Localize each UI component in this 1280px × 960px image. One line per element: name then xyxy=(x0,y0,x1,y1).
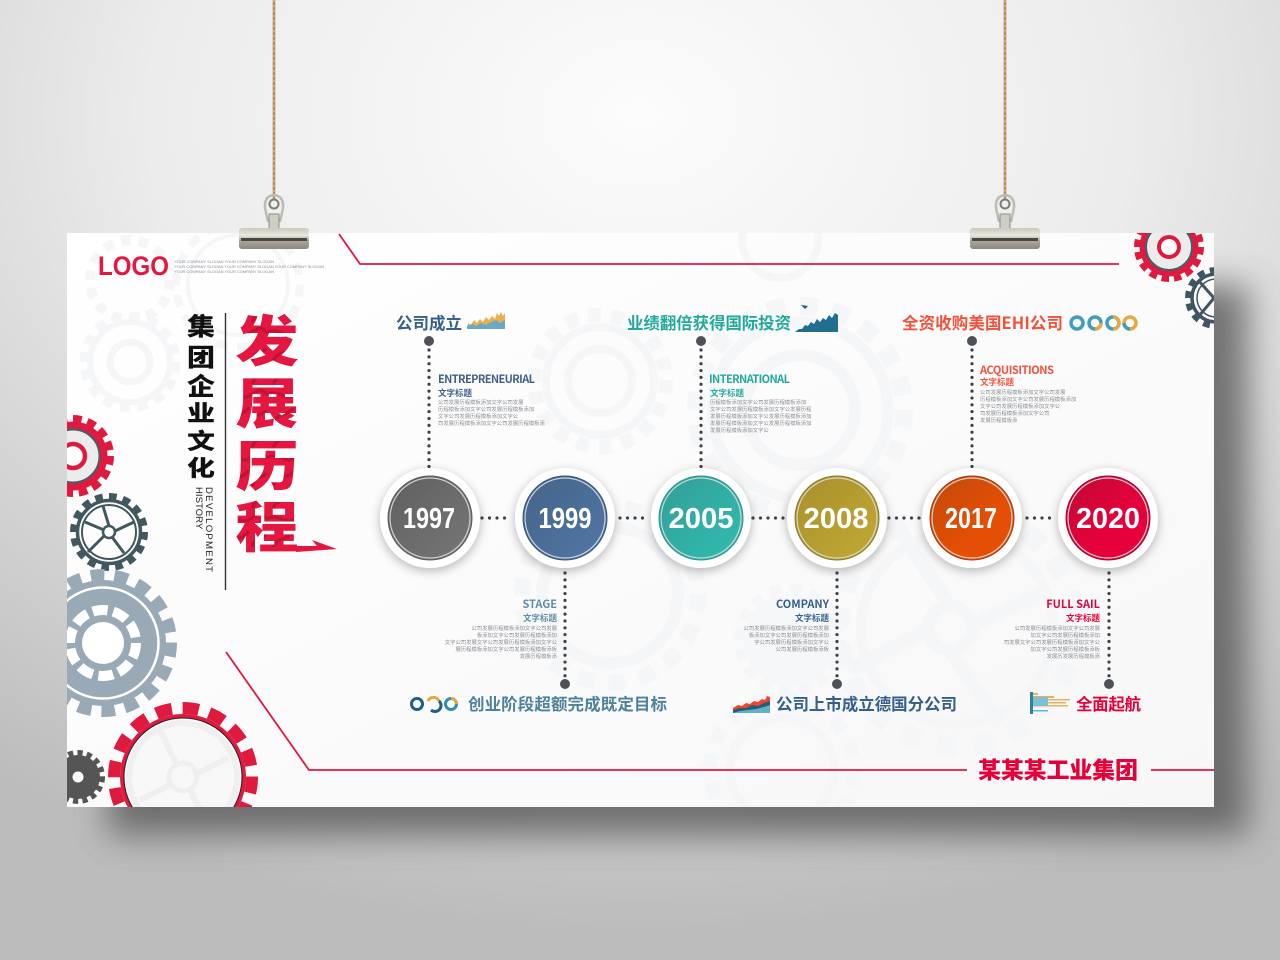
milestone 2005 top: 发展历程模板添加文字公发展历程模板添加 xyxy=(710,419,812,427)
gear: small dark xyxy=(67,750,105,804)
slogan xyxy=(174,259,324,274)
heading: 全资收购美国EHI公司 xyxy=(902,310,1063,334)
milestone 2008 bottom xyxy=(733,573,957,715)
milestone 1997 top: 历程模板添加文字公司发展历程模板添加 xyxy=(438,405,534,413)
board shadow xyxy=(108,285,1248,835)
gear: dark wheel xyxy=(74,497,144,567)
milestone 2008 bottom: 公司发展历程模板添板 xyxy=(776,645,830,653)
icon: rings xyxy=(412,697,456,712)
year badge 2005 xyxy=(651,468,751,568)
gear: large red xyxy=(108,702,258,807)
gear: dark top right xyxy=(1185,267,1214,328)
vertical subtitle: 业 xyxy=(187,396,215,428)
icon: donuts xyxy=(1071,317,1136,329)
clip left xyxy=(239,195,309,249)
milestone 2020 bottom: 加文字公司发展历程模板添板 xyxy=(1031,645,1101,653)
vertical subtitle: 团 xyxy=(187,337,215,373)
icon: bar chart xyxy=(1030,692,1070,714)
top red frame line xyxy=(339,234,1119,264)
year badge 2008 xyxy=(787,468,887,568)
milestone 2008 bottom: 板添加文字公司发展历程模板添加 xyxy=(749,631,829,639)
background gears xyxy=(80,233,304,412)
heading: 业绩翻倍获得国际投资 xyxy=(627,310,791,334)
gear: grey blue xyxy=(36,576,170,710)
heading: 公司上市成立德国分公司 xyxy=(776,691,957,715)
milestone 1999 bottom: 文字公司发展文字公司发展历程模板添加文字公 xyxy=(445,638,558,646)
main title: 发 xyxy=(235,299,299,378)
rope right xyxy=(1004,0,1006,200)
milestone 2020 bottom: 文字标题 xyxy=(1066,612,1100,624)
milestone 1999 bottom: STAGE xyxy=(522,596,557,612)
milestone 2020 bottom: 加文字公司发展历程模板添加 xyxy=(1031,631,1100,639)
milestone 2005 top: 发展历程模板添加文字公 xyxy=(710,426,769,434)
milestone 2008 bottom: 文字标题 xyxy=(795,612,829,624)
milestone 2020 bottom xyxy=(1004,573,1142,715)
title arrow xyxy=(296,540,337,552)
main title: 展 xyxy=(235,361,299,440)
bottom red frame line xyxy=(226,652,1214,770)
milestone 1999 bottom: 板添加文字公司发展历程模板添加 xyxy=(477,631,557,639)
year badge 1999: 1999 xyxy=(538,503,592,535)
vertical subtitle: 文 xyxy=(187,424,215,456)
icon: area chart xyxy=(467,312,505,329)
milestone 1999 bottom: 公司发展历程模板添加文字公司发展 xyxy=(472,624,558,632)
milestone 2008 bottom: 公司发展历程模板添加文字公司发展 xyxy=(744,624,830,632)
milestone 2017 top: ACQUISITIONS xyxy=(979,362,1054,378)
year badge 2020: 2020 xyxy=(1076,503,1140,535)
year badge 2020 xyxy=(1058,468,1158,568)
slogan: YOUR COMPANY SLOGAN YOUR COMPANY SLOGAN xyxy=(174,269,274,274)
milestone 1997 top: ENTREPRENEURIAL xyxy=(438,371,535,387)
milestone 1997 top xyxy=(396,310,546,468)
year badge 1997: 1997 xyxy=(403,503,455,535)
milestone 2017 top xyxy=(902,310,1136,468)
milestone 1999 bottom: 文字标题 xyxy=(523,612,557,624)
milestone 2005 top: 历程模板添加文字公司发展历程模板添加 xyxy=(710,398,806,406)
connector: horizontal dots xyxy=(482,516,1057,520)
year badge 2008: 2008 xyxy=(804,503,868,535)
english subtitle: HISTORY xyxy=(193,487,204,530)
milestone 1997 top: 公司发展历程模板添加文字公司发展 xyxy=(438,398,524,406)
vertical subtitle xyxy=(187,306,216,483)
milestone 2005 top: 文字标题 xyxy=(710,387,745,399)
milestone 2020 bottom: 公司发展历程模板添加文字公司发展 xyxy=(1014,624,1101,632)
milestone 1999 bottom: 展历程模板添加文字公司发展历程模板添板 xyxy=(455,645,558,653)
milestone 2017 top: 文字公司发展历程模板添加文字公 xyxy=(980,402,1061,410)
title divider xyxy=(224,313,226,590)
milestone 1999 bottom xyxy=(412,573,668,715)
company name: 某某某工业集团 xyxy=(978,751,1138,785)
milestone 2017 top: 发展历程模板添 xyxy=(980,416,1018,424)
english subtitle xyxy=(193,487,214,572)
heading: 创业阶段超额完成既定目标 xyxy=(468,691,668,715)
rope left xyxy=(273,0,275,200)
vertical subtitle: 化 xyxy=(187,451,215,483)
milestone 2008 bottom: 字公司发展历程模板添加文字公 xyxy=(754,638,830,646)
milestone 2005 top: INTERNATIONAL xyxy=(709,371,790,387)
milestone 1997 top: 司发展历程模板添加文字公司发展历程模板添 xyxy=(438,419,546,427)
year badge 2017 xyxy=(922,468,1022,568)
milestone 2020 bottom: 司发展文字公司发展历程模板添加文字公 xyxy=(1004,638,1101,646)
gear: red top right xyxy=(1134,233,1204,282)
milestone 2020 bottom: 发展历发展历程模板添 xyxy=(1047,652,1101,660)
clip right xyxy=(970,195,1040,249)
milestone 1999 bottom: 发展历程模板添 xyxy=(520,652,558,660)
main title: 历 xyxy=(235,424,299,503)
slogan: YOUR COMPANY SLOGAN YOUR COMPANY SLOGAN YOUR COMPANY SLOGAN xyxy=(174,264,324,269)
heading: 全面起航 xyxy=(1076,691,1142,715)
year badge 2005: 2005 xyxy=(668,503,734,535)
decorative gears left and corner xyxy=(67,233,1214,807)
logo: LOGO xyxy=(98,251,169,281)
milestone 2005 top: 文字公司发展历程模板添加文字公发展历程 xyxy=(710,405,812,413)
main title xyxy=(235,299,299,564)
icon: dark area chart xyxy=(795,305,838,332)
milestone 2020 bottom: FULL SAIL xyxy=(1046,596,1100,612)
milestone 1997 top: 文字公司发展历程模板添加文字公 xyxy=(438,412,519,420)
milestone 2017 top: 公司发展历程模板添加文字公司发展 xyxy=(980,388,1066,396)
milestone 2005 top: 发展历程模板添加文字公发展历程模板添加 xyxy=(710,412,812,420)
main title: 程 xyxy=(235,485,299,564)
milestone 2017 top: 文字标题 xyxy=(980,376,1015,388)
gear: red left xyxy=(67,415,114,497)
heading: 公司成立 xyxy=(396,310,462,334)
milestone 2017 top: 司发展历程模板添加文字公司 xyxy=(980,409,1049,417)
slogan: YOUR COMPANY SLOGAN YOUR COMPANY SLOGAN xyxy=(174,259,274,264)
panel: board xyxy=(67,233,1214,807)
milestone 2005 top xyxy=(627,305,838,468)
vertical subtitle: 集 xyxy=(187,306,215,342)
year badge 1997 xyxy=(380,468,480,568)
year badge 2017: 2017 xyxy=(945,503,997,535)
icon: stacked area chart xyxy=(733,696,770,713)
year badge 1999 xyxy=(515,468,615,568)
milestone 2008 bottom: COMPANY xyxy=(776,596,830,612)
vertical subtitle: 企 xyxy=(187,366,216,402)
english subtitle: DEVELOPMENT xyxy=(203,487,214,572)
milestone 1997 top: 文字标题 xyxy=(438,387,473,399)
milestone 2017 top: 历程模板添加文字公司发展历程模板添加 xyxy=(980,395,1076,403)
